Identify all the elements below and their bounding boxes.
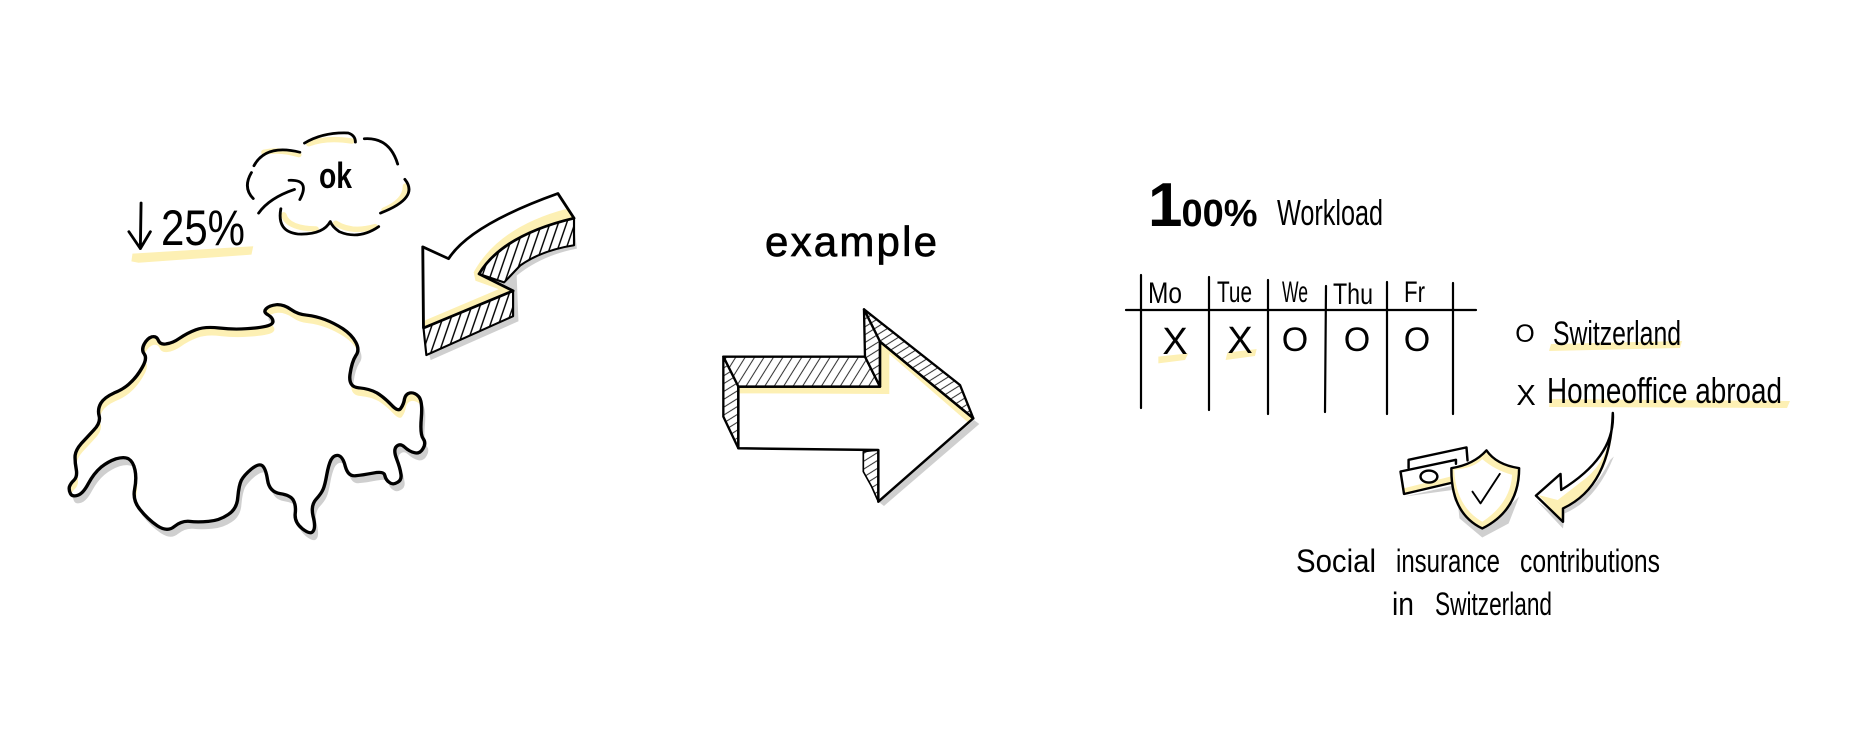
label: ok: ok bbox=[319, 155, 353, 196]
schedule marks: O bbox=[1344, 321, 1370, 359]
caption: social insurance contributions bbox=[1296, 543, 1660, 579]
table grid bbox=[1126, 275, 1476, 414]
highlight under Tuesday X bbox=[1226, 349, 1257, 360]
heading: example: example bbox=[765, 218, 937, 265]
legend Homeoffice abroad: Homeoffice abroad bbox=[1547, 370, 1782, 411]
infographic canvas bbox=[68, 132, 1790, 616]
column labels: Mo bbox=[1148, 277, 1182, 310]
icon: curved 3D arrow bbox=[423, 193, 577, 360]
caption: social insurance contributions: contributions bbox=[1520, 543, 1660, 579]
label: 25%: 25% bbox=[161, 200, 245, 256]
schedule marks: X bbox=[1227, 320, 1253, 362]
heading: Workload: Workload bbox=[1277, 192, 1383, 233]
panel: left, reduced workload in Switzerland bbox=[69, 133, 577, 541]
legend bbox=[1515, 315, 1790, 412]
icon: curved small arrow bbox=[1536, 413, 1614, 528]
caption: in Switzerland: Switzerland bbox=[1435, 586, 1552, 622]
icon: large 3D arrow bbox=[723, 309, 979, 506]
schedule marks: O bbox=[1404, 321, 1430, 359]
icon: down arrow bbox=[129, 203, 150, 249]
icon: thought cloud bbox=[247, 133, 409, 235]
caption: social insurance contributions: insurance bbox=[1396, 543, 1500, 579]
legend Switzerland: Switzerland bbox=[1553, 315, 1681, 353]
column labels bbox=[1148, 276, 1425, 311]
column labels: Tue bbox=[1217, 276, 1252, 309]
highlight under Switzerland bbox=[1549, 341, 1682, 351]
caption: in Switzerland bbox=[1392, 586, 1552, 622]
schedule marks bbox=[1162, 320, 1430, 363]
legend cross: X bbox=[1516, 380, 1536, 412]
column labels: We bbox=[1282, 276, 1308, 309]
icon: banknotes and shield bbox=[1401, 447, 1519, 538]
highlight under 25% bbox=[131, 246, 253, 263]
panel: right, 100% workload schedule bbox=[1126, 171, 1790, 622]
heading: 100%: 100% bbox=[1148, 171, 1258, 240]
weekly table bbox=[1126, 275, 1476, 414]
schedule marks: X bbox=[1162, 321, 1188, 363]
panel: middle, example transition bbox=[723, 218, 979, 506]
highlight under Monday X bbox=[1158, 353, 1188, 363]
caption: social insurance contributions: Social bbox=[1296, 543, 1376, 579]
highlight under Homeoffice abroad bbox=[1549, 399, 1790, 408]
caption: in Switzerland: in bbox=[1392, 586, 1414, 622]
schedule marks: O bbox=[1282, 321, 1308, 359]
column labels: Fr bbox=[1404, 276, 1425, 309]
legend circle: O bbox=[1515, 320, 1535, 348]
column labels: Thu bbox=[1333, 278, 1373, 311]
icon: map of Switzerland bbox=[69, 305, 428, 541]
